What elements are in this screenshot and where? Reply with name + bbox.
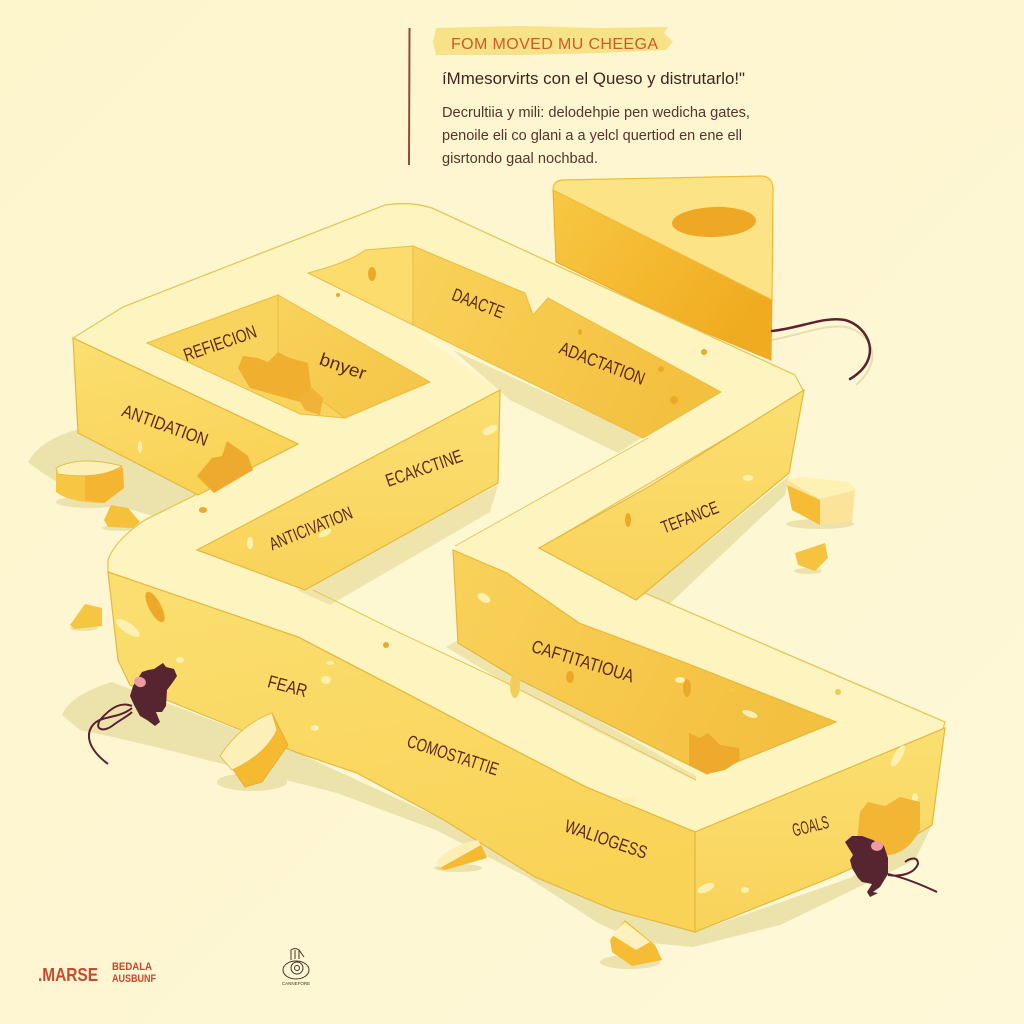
label: caftitatioua: CAFTITATIOUA <box>529 636 636 686</box>
right front wall <box>695 728 945 932</box>
pit: upper left facet <box>308 246 413 325</box>
front wall <box>108 572 695 932</box>
ground shadows <box>28 348 932 969</box>
body text <box>442 104 750 167</box>
tail shadow <box>772 326 872 385</box>
brand: bedala ausbunf <box>112 961 156 985</box>
chunk: front small <box>436 840 487 870</box>
back cheese wedge <box>553 176 773 360</box>
label: anticivation: ANTICIVATION <box>266 503 355 554</box>
wedge top <box>553 176 773 300</box>
chunk: top left pit <box>238 352 323 415</box>
chunk: far left small <box>70 604 102 629</box>
label: adactation: ADACTATION <box>557 338 648 389</box>
emblem: CANNEFORE <box>282 981 310 986</box>
mouse tail behind wedge <box>772 319 872 385</box>
chunk: goals <box>857 797 920 855</box>
brand: marse: .MARSE <box>38 965 98 985</box>
label: refiecion: REFIECION <box>181 322 259 365</box>
chunk: large front <box>220 713 288 787</box>
mouse ear <box>133 675 147 689</box>
lower inner wall <box>453 550 836 774</box>
middle wall <box>197 390 500 590</box>
mouse tail <box>888 858 937 892</box>
chunk: left rounded <box>56 461 124 503</box>
mouse tail <box>89 705 132 764</box>
tail line <box>772 319 870 379</box>
mouse: right <box>845 836 937 897</box>
label: waliogess: WALIOGESS <box>562 816 650 863</box>
chunk: bottom <box>610 920 662 966</box>
pit: top left right wall <box>278 295 430 418</box>
gap shadows <box>297 350 696 781</box>
brand: bedala ausbunf: BEDALA <box>112 961 152 973</box>
wedge side <box>553 190 772 360</box>
label: ecakctine: ECAKCTINE <box>383 446 465 491</box>
title highlight <box>433 26 673 55</box>
wedge hole <box>672 206 756 238</box>
wall labels <box>119 284 831 863</box>
emblem <box>282 948 310 986</box>
mouse body <box>130 663 177 726</box>
mouse: left <box>89 663 177 764</box>
cheese chunks <box>56 352 920 966</box>
band outlines <box>313 438 696 780</box>
footer logos <box>38 948 310 986</box>
mouse body <box>845 836 888 897</box>
subtitle: íMmesorvirts con el Queso y distrutarlo!" <box>442 69 745 88</box>
left front wall <box>73 338 298 495</box>
label: comostattie: COMOSTATTIE <box>405 731 501 779</box>
label: tefance: TEFANCE <box>658 497 721 537</box>
brand: bedala ausbunf: AUSBUNF <box>112 973 156 985</box>
cheese maze <box>73 204 945 932</box>
body text: penoile eli co glani a a yelcl quertiod en ene ell <box>442 127 742 144</box>
title: FOM MOVED MU CHEEGA <box>451 36 658 53</box>
chunk: inner wall <box>689 733 740 774</box>
label: daacte: DAACTE <box>449 284 507 322</box>
chunk: right small <box>795 543 828 571</box>
mouse ear <box>871 841 883 851</box>
chunk: right upper <box>787 477 855 525</box>
label: antidation: ANTIDATION <box>119 401 211 450</box>
inner gap floor <box>313 330 696 780</box>
chunk: small left <box>104 505 140 528</box>
pit: upper long wall <box>413 246 721 438</box>
header block <box>409 26 750 167</box>
label: fear: FEAR <box>266 671 309 701</box>
right arm wall <box>539 390 804 600</box>
label: bnyer: bnyer <box>317 349 369 384</box>
pit: top left floor <box>147 295 345 418</box>
header rule <box>408 28 410 165</box>
holes and flecks <box>142 267 841 698</box>
label: goals: GOALS <box>790 812 831 840</box>
body text: Decrultiia y mili: delodehpie pen wedicha gates, <box>442 104 750 121</box>
maze top surface <box>73 204 945 832</box>
chunk: left wall <box>197 441 253 493</box>
body text: gisrtondo gaal nochbad. <box>442 150 598 167</box>
